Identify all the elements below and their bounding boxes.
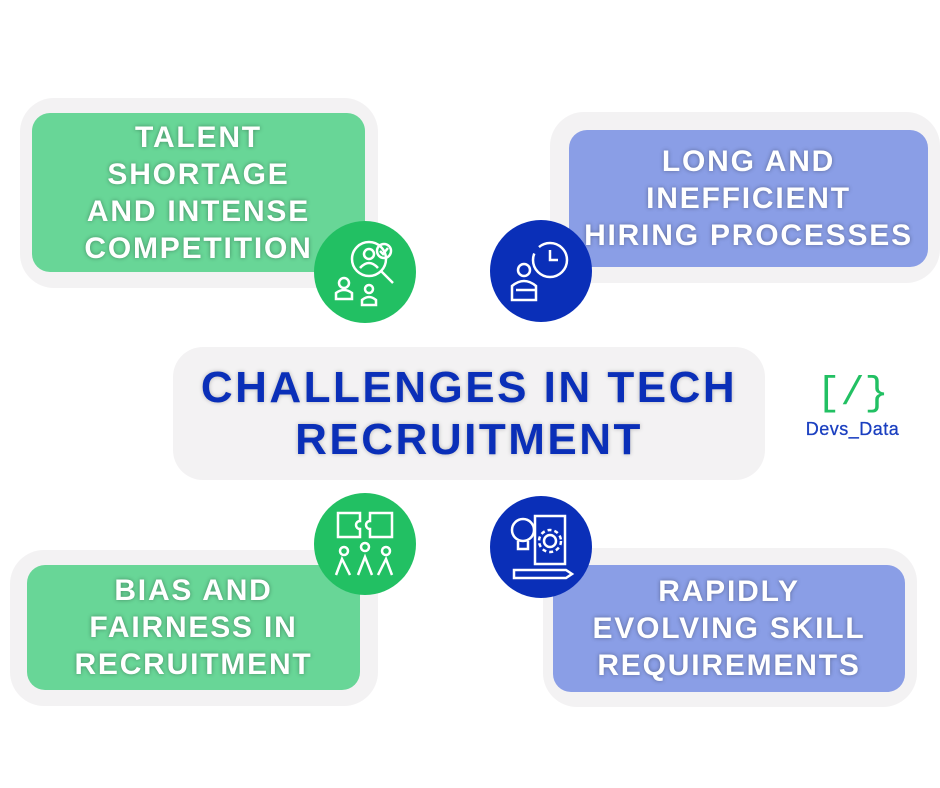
icon: bulb gear — [490, 496, 592, 598]
heading: skills: RAPIDLY — [658, 575, 800, 608]
heading: long hiring: LONG AND — [662, 145, 835, 178]
heading: talent shortage: SHORTAGE — [107, 158, 290, 190]
logo — [806, 372, 899, 439]
title panel: RECRUITMENT — [295, 414, 643, 464]
heading: long hiring — [569, 130, 928, 267]
icon: search people — [314, 221, 416, 323]
heading: talent shortage: AND INTENSE — [87, 194, 310, 228]
logo: Devs_Data — [806, 419, 899, 439]
heading: skills: REQUIREMENTS — [597, 649, 861, 682]
heading: bias: FAIRNESS IN — [89, 611, 298, 644]
panel: skills — [490, 496, 917, 707]
heading: bias — [27, 565, 360, 690]
panel: talent shortage — [20, 98, 416, 323]
logo: [/} — [816, 372, 888, 417]
heading: talent shortage: COMPETITION — [84, 232, 313, 264]
heading: talent shortage: TALENT — [135, 120, 262, 154]
heading: long hiring: INEFFICIENT — [646, 182, 851, 215]
title panel — [173, 347, 765, 480]
panel: long hiring — [490, 112, 940, 322]
panel: bias — [10, 493, 416, 706]
heading: long hiring: HIRING PROCESSES — [584, 219, 913, 252]
icon: person clock — [490, 220, 592, 322]
heading: bias: RECRUITMENT — [74, 648, 313, 681]
heading: skills: EVOLVING SKILL — [592, 612, 866, 645]
heading: skills — [553, 565, 905, 692]
heading: talent shortage — [32, 113, 365, 272]
heading: bias: BIAS AND — [114, 574, 273, 607]
title panel: CHALLENGES IN TECH — [201, 362, 737, 412]
icon: puzzle team — [314, 493, 416, 595]
